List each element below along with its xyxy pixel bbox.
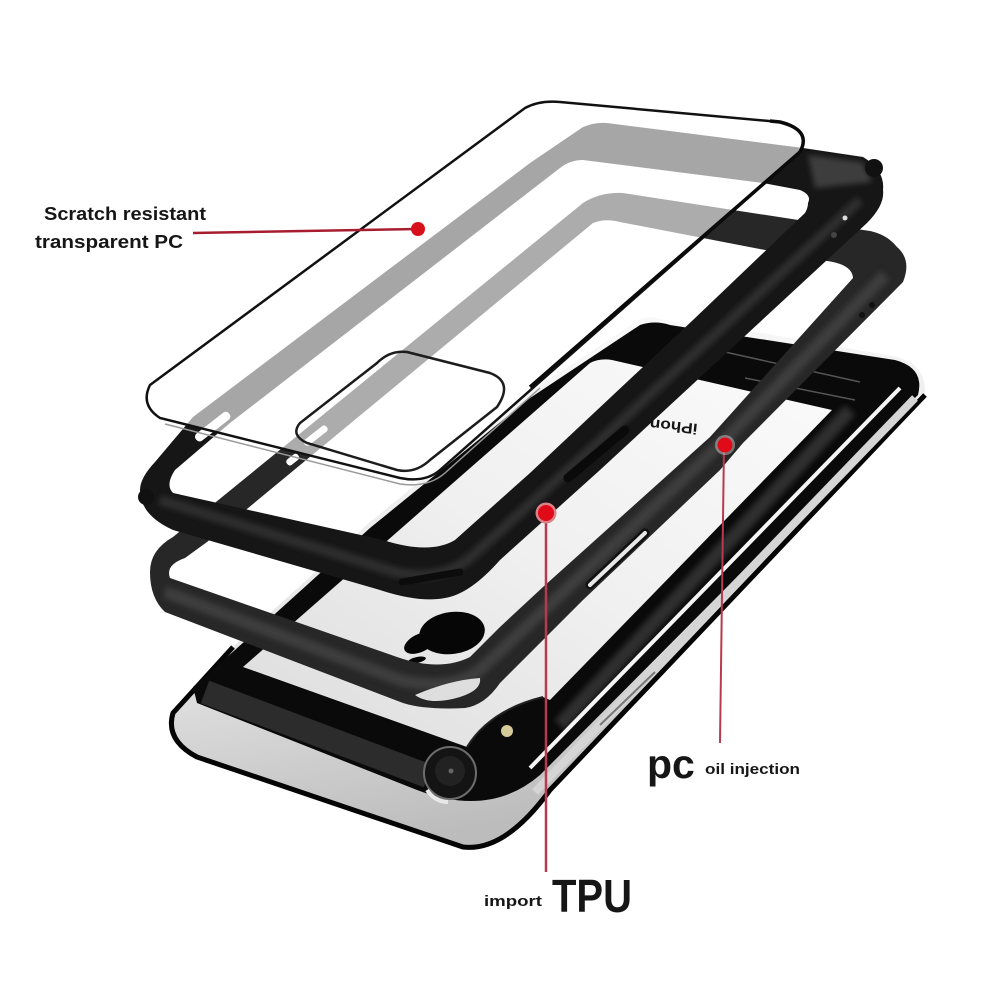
- phone window inner lines: [725, 352, 860, 400]
- callout: TPU line: [536, 502, 556, 872]
- callout: pc oil injection line: [715, 435, 735, 743]
- label: import TPU: TPU: [552, 870, 632, 922]
- side button: [590, 533, 645, 585]
- label: scratch resistant transparent PC: [35, 204, 206, 252]
- label: scratch resistant transparent PC: Scratch resistant: [44, 204, 206, 224]
- camera lens: [424, 747, 476, 802]
- bumper pill cutout: [415, 678, 480, 701]
- top right shading: [808, 155, 872, 188]
- corner nubs: [138, 159, 883, 505]
- label: pc oil injection: oil injection: [705, 761, 800, 778]
- phone back window: [243, 359, 832, 747]
- label: scratch resistant transparent PC: transparent PC: [35, 232, 183, 252]
- phone body: [171, 317, 925, 847]
- port holes: [842, 216, 848, 220]
- phone text: iPhon: [649, 415, 698, 437]
- flash: [501, 725, 513, 737]
- label: import TPU: import: [484, 893, 542, 910]
- lower bumper frame: [150, 193, 906, 708]
- camera island edge: [467, 697, 543, 747]
- label: pc oil injection: [647, 741, 800, 787]
- label: pc oil injection: pc: [647, 741, 695, 787]
- mute slot: [600, 672, 655, 725]
- callout: scratch resistant line: [193, 222, 425, 236]
- speaker dots: [859, 302, 875, 318]
- camera cutout outline: [296, 352, 504, 471]
- label: import TPU: [484, 870, 632, 922]
- apple logo: [401, 608, 488, 665]
- upper bumper frame: [138, 123, 883, 599]
- glass panel: transparent PC: [147, 102, 803, 485]
- corner slots: [193, 410, 329, 467]
- side buttons: [402, 430, 625, 582]
